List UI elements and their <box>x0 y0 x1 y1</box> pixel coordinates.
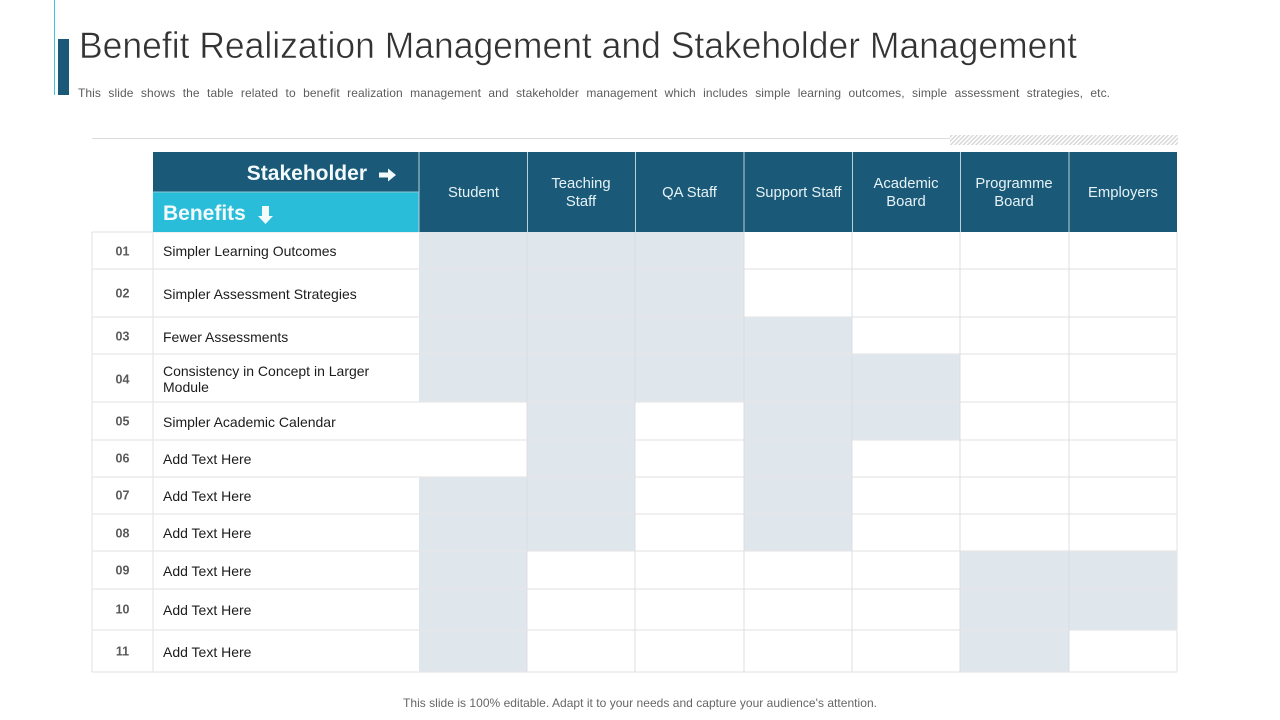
header: stakeholder columns: Employers <box>1088 185 1158 201</box>
row labels: Simpler Assessment Strategies <box>163 286 357 302</box>
grid lines <box>92 232 1177 672</box>
icon: down arrow <box>258 206 273 224</box>
row numbers: 04 <box>116 372 129 386</box>
row numbers: 08 <box>116 526 129 540</box>
row labels: Add Text Here <box>163 644 252 660</box>
header: stakeholder columns: Support Staff <box>755 185 842 201</box>
header: stakeholder columns <box>153 152 1177 232</box>
header: stakeholder columns: Programme <box>975 176 1053 192</box>
row numbers: 10 <box>116 602 129 616</box>
header: stakeholder columns: Staff <box>566 194 597 210</box>
shaded cells: benefit and stakeholder matrix <box>419 232 1177 672</box>
header: stakeholder columns: Teaching <box>551 176 611 192</box>
row numbers: 11 <box>116 644 129 658</box>
icon: right arrow <box>379 168 396 182</box>
header: stakeholder columns: QA Staff <box>662 185 718 201</box>
row labels: Add Text Here <box>163 451 252 467</box>
row labels: Add Text Here <box>163 563 252 579</box>
row numbers: 07 <box>116 488 129 502</box>
row labels: Simpler Learning Outcomes <box>163 243 337 259</box>
row labels: Add Text Here <box>163 525 252 541</box>
accent bar: title marker <box>54 0 69 95</box>
row labels: Fewer Assessments <box>163 329 288 345</box>
header: benefits cell <box>153 192 419 232</box>
header: stakeholder cell: Stakeholder <box>247 162 367 185</box>
header: stakeholder columns: Student <box>448 185 499 201</box>
row labels: Add Text Here <box>163 602 252 618</box>
title: Benefit Realization Management and Stakeholder Management <box>79 25 1078 66</box>
row labels: Module <box>163 379 209 395</box>
row numbers: 05 <box>116 414 129 428</box>
row numbers: 03 <box>116 330 129 344</box>
subtitle: This slide shows the table related to benefit realization management and stakeholder management which includes simple learning outcomes, simple assessment strategies, etc. <box>78 86 1110 100</box>
row numbers: 01 <box>116 244 129 258</box>
row numbers: 06 <box>116 452 129 466</box>
row numbers: 09 <box>116 564 129 578</box>
row labels: Simpler Academic Calendar <box>163 414 336 430</box>
header: stakeholder columns: Board <box>886 194 926 210</box>
header: stakeholder columns: Academic <box>874 176 939 192</box>
header: benefits cell: Benefits <box>163 202 246 225</box>
header rule with hatched end <box>92 135 1178 145</box>
row labels <box>163 243 370 660</box>
header: stakeholder cell <box>153 152 419 192</box>
table <box>92 152 1177 672</box>
header: stakeholder columns: Board <box>994 194 1034 210</box>
row numbers: 02 <box>116 286 129 300</box>
row labels: Add Text Here <box>163 488 252 504</box>
footer note: This slide is 100% editable. Adapt it to your needs and capture your audience's attention. <box>403 696 877 710</box>
row numbers <box>116 244 129 658</box>
row labels: Consistency in Concept in Larger <box>163 363 370 379</box>
